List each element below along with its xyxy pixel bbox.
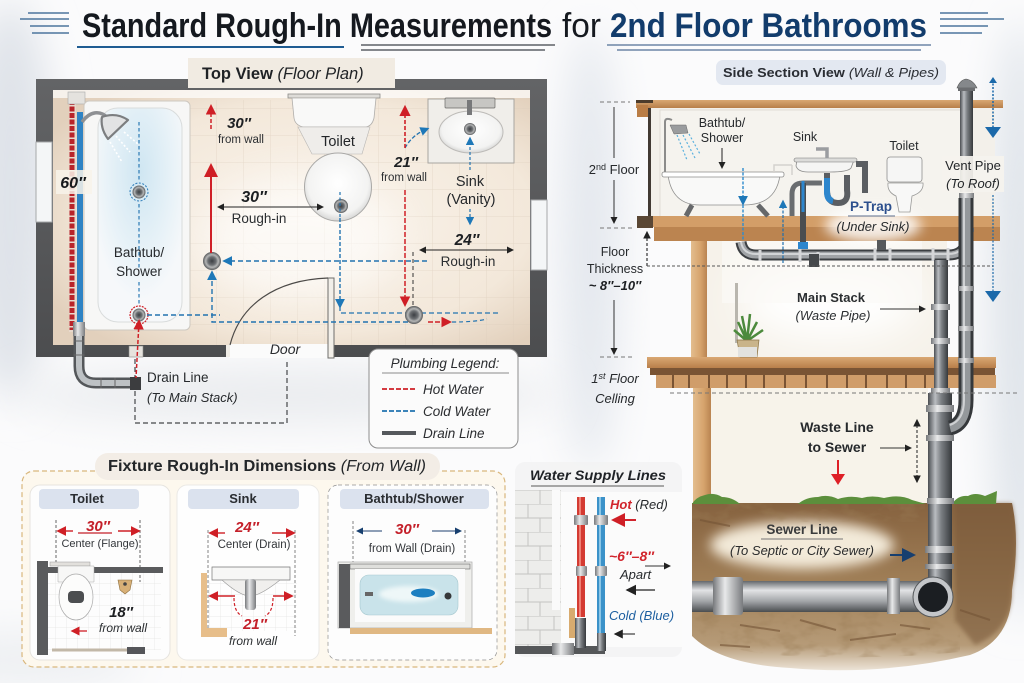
title right part: 2nd Floor Bathrooms [610, 7, 927, 45]
support post [691, 241, 707, 357]
label: sink vanity: Sink [456, 174, 485, 190]
label: main stack: (Waste Pipe) [796, 308, 870, 323]
label: waste line: Waste Line [800, 419, 874, 435]
panel: fixture rough-in dimensions [22, 453, 505, 667]
card: bathtub shower: from Wall (Drain) [369, 543, 455, 555]
label: spacing: ~6″–8″ [609, 548, 655, 564]
door label: Door [270, 341, 302, 357]
roof beam [636, 100, 1003, 117]
label: waste line [800, 419, 917, 485]
card: bathtub shower [328, 485, 497, 660]
dimension: 21 from wall: 21″ [393, 154, 419, 171]
label: sink vanity [447, 174, 495, 208]
dimension: 30 from wall [211, 107, 264, 146]
icon: shower head [82, 113, 138, 162]
floor [53, 90, 530, 345]
dimension: second floor: Floor [606, 162, 640, 177]
icon: potted plant [734, 314, 763, 357]
card: sink [177, 485, 319, 660]
bathtub: Shower [116, 264, 162, 279]
dimension: second floor: nd [596, 162, 606, 172]
label: hot red [610, 497, 668, 520]
vent dimension arrow [985, 77, 1001, 302]
label: waste line: to Sewer [808, 439, 867, 455]
label: sink vanity: (Vanity) [447, 192, 495, 208]
card: sink: 21″ [242, 616, 268, 633]
legend: drain line [382, 426, 485, 441]
supply pipes [68, 92, 85, 332]
door dashed run [135, 357, 287, 423]
bathtub [84, 101, 190, 330]
label: hot red: Hot (Red) [610, 497, 668, 512]
sink vanity [428, 98, 514, 163]
card: bathtub shower: 30″ [395, 521, 420, 538]
plumbing legend: Plumbing Legend: [391, 356, 500, 371]
vent stack lower [950, 198, 974, 428]
card: sink: from wall [229, 634, 277, 648]
label: bathtub in section: Bathtub/ [699, 116, 746, 130]
card: toilet: Center (Flange) [61, 538, 139, 550]
legend: drain line: Drain Line [423, 426, 485, 441]
label: drain line [147, 370, 238, 405]
door opening [226, 278, 334, 358]
bathtub: Bathtub/ [114, 245, 164, 260]
drain pipe [73, 322, 141, 390]
walls [36, 79, 547, 357]
label: spacing [609, 548, 670, 590]
toilet in section: Toilet [889, 139, 919, 153]
label: p-trap: (Under Sink) [837, 219, 909, 234]
first floor ceiling structure [647, 357, 996, 388]
heading: side section: Side Section View (Wall & Pipes) [723, 65, 939, 80]
sink in section: Sink [793, 130, 818, 144]
panel: water supply lines [515, 462, 682, 657]
label: floor thickness [587, 232, 993, 357]
pipe fittings base [515, 608, 606, 655]
dimension: 24 rough-in: Rough-in [441, 254, 495, 269]
card: toilet: from wall [99, 621, 147, 635]
dimension: 30 from wall: 30″ [227, 115, 252, 132]
floor drains [203, 252, 423, 324]
label: 60 inch: 60″ [60, 175, 87, 192]
dimension: 21 from wall: from wall [381, 172, 427, 184]
label: main stack: Main Stack [797, 290, 866, 305]
label: sewer line: Sewer Line [766, 522, 838, 537]
label: floor thickness: Floor [601, 245, 629, 259]
heading: water supply lines: Water Supply Lines [530, 468, 667, 483]
dimension: second floor [589, 102, 640, 228]
label: first floor ceiling [591, 371, 1020, 406]
sink in section [793, 130, 857, 172]
drain pipe run [741, 193, 974, 267]
label: first floor ceiling: st [598, 371, 606, 381]
toilet [288, 94, 380, 221]
label: first floor ceiling: Floor [606, 371, 639, 386]
card: bathtub shower: Bathtub/Shower [364, 491, 464, 506]
label: p-trap: P-Trap [850, 199, 892, 214]
card: toilet [30, 485, 170, 660]
legend: cold water: Cold Water [423, 404, 491, 419]
panel: side section view [587, 60, 1020, 670]
label: floor thickness: ~ 8″–10″ [589, 278, 642, 293]
label: vent pipe: Vent Pipe [945, 158, 1001, 173]
label: vent pipe: (To Roof) [946, 176, 1000, 191]
toilet: Toilet [321, 134, 355, 150]
title [20, 7, 1004, 50]
toilet in section [887, 139, 923, 212]
label: first floor ceiling: 1 [591, 371, 598, 386]
cold pipe [594, 497, 608, 635]
label: cold blue: Cold (Blue) [609, 608, 674, 623]
grass [692, 491, 997, 504]
label: sewer line: (To Septic or City Sewer) [730, 543, 874, 558]
legend: cold water [382, 404, 491, 419]
wall penetration [129, 346, 143, 357]
clawfoot bathtub [662, 119, 792, 216]
panel: top view floor plan [36, 58, 547, 448]
legend: hot water: Hot Water [423, 382, 484, 397]
card: sink: Sink [229, 491, 257, 506]
card: sink: 24″ [234, 519, 260, 536]
heading: fixture dimensions [95, 453, 440, 480]
dimension: 24 rough-in [420, 232, 513, 269]
blue supply arrows [743, 168, 783, 263]
sewer pipe mouth [913, 577, 953, 617]
label: drain line: Drain Line [147, 370, 209, 385]
p-trap pipe [792, 164, 865, 249]
window left [36, 142, 52, 222]
dimension: 21 from wall [381, 108, 427, 304]
brick wall [515, 490, 561, 650]
cold and hot runs [147, 129, 500, 322]
vent pipe upper [957, 79, 977, 192]
card: toilet: 30″ [86, 518, 111, 535]
dimension: 30 rough-in [211, 167, 323, 253]
sewer pipe [692, 577, 932, 615]
card: sink: Center (Drain) [218, 539, 291, 551]
heading: top view [188, 58, 395, 88]
label: drain line: (To Main Stack) [147, 390, 238, 405]
window right [531, 200, 547, 270]
label: spacing: Apart [619, 567, 652, 582]
heading: fixture dimensions: Fixture Rough-In Dimensions (From Wall) [108, 458, 426, 475]
soil ground [692, 503, 1016, 670]
dimension: second floor: 2 [589, 162, 596, 177]
label: bathtub in section [699, 116, 746, 168]
label: vent pipe [942, 156, 1004, 192]
upper room [648, 105, 995, 217]
label: main stack [796, 290, 925, 323]
label: sewer line [730, 522, 914, 558]
label: bathtub in section: Shower [701, 131, 743, 145]
dimension: 30 rough-in: 30″ [241, 189, 268, 206]
label: 60 inch [56, 170, 92, 194]
heading: top view: Top View (Floor Plan) [202, 65, 364, 83]
title left part: Standard Rough-In Measurements [82, 7, 552, 45]
main stack [925, 260, 954, 596]
label: cold blue [609, 608, 674, 634]
card: toilet: 18″ [109, 604, 134, 621]
hot pipe [574, 497, 588, 617]
label: floor thickness: Thickness [587, 262, 643, 276]
lower room [707, 241, 947, 357]
legend: hot water [382, 382, 484, 397]
dimension: 30 from wall: from wall [218, 134, 264, 146]
label: first floor ceiling: Celling [595, 391, 636, 406]
dimension: 30 rough-in: Rough-in [232, 211, 286, 226]
title connector: for [562, 7, 601, 45]
heading: side section [716, 60, 946, 85]
card: toilet: Toilet [70, 491, 105, 506]
lower wall and post [693, 388, 928, 503]
second floor slab [637, 208, 1000, 242]
label: p-trap [837, 199, 909, 234]
dimension: 24 rough-in: 24″ [454, 232, 480, 249]
plumbing legend [369, 349, 518, 448]
